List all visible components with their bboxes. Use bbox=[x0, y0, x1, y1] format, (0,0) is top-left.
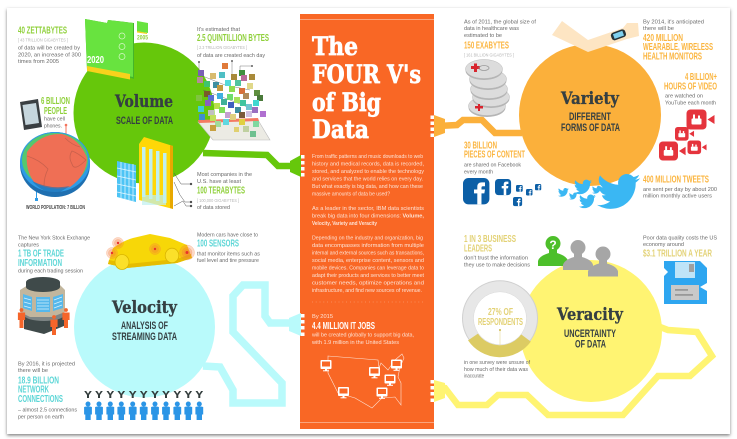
stat: 3.1 trillion: economy around bbox=[643, 242, 684, 248]
stat: 30 billion pieces of content: every month bbox=[464, 169, 493, 175]
text block: intro: stored, and analyzed to enable the technology bbox=[312, 169, 424, 175]
icon: business leaders silhouettes: ? bbox=[549, 238, 557, 252]
stat: 150 exabytes: [ 161 BILLION GIGABYTES ] bbox=[464, 52, 514, 58]
stat: 6 billion people: 6 BILLION bbox=[41, 96, 70, 107]
icon: arm with wearable bbox=[552, 21, 639, 52]
stat: 40 zettabytes: of data will be created by bbox=[18, 46, 80, 52]
text block: intro: and services that the world relies on every day. bbox=[312, 176, 423, 182]
stat: 100 terabytes bbox=[197, 172, 252, 211]
stat: 6 billion people: have cell bbox=[44, 117, 65, 123]
stat: 3.1 trillion: Poor data quality costs the US bbox=[643, 235, 717, 241]
stat: 18.9 billion connections: there will be bbox=[18, 368, 48, 374]
stat: 4.4 million IT jobs: with 1.9 million in the United States bbox=[311, 340, 399, 346]
panel: orange centre column bbox=[300, 14, 434, 429]
heading: velocity bbox=[111, 298, 178, 343]
stat: 420 million monitors: By 2014, it's anticipated bbox=[643, 19, 704, 25]
heading: variety: FORMS OF DATA bbox=[561, 122, 620, 134]
text block: intro: From traffic patterns and music downloads to web bbox=[312, 154, 423, 160]
text block: data sources: internal and external sources such as transactions, bbox=[312, 250, 424, 256]
icon: stock exchange bbox=[18, 277, 70, 335]
plug: veracity bbox=[430, 380, 445, 402]
text block: data sources: customer needs, optimize operations and bbox=[312, 280, 424, 286]
stat: 1 in 3 business leaders: don't trust the information bbox=[464, 256, 528, 262]
stat: 30 billion pieces of content: 30 BILLION bbox=[464, 140, 497, 151]
heading: volume: SCALE OF DATA bbox=[116, 115, 173, 127]
title: The bbox=[312, 32, 358, 61]
heading: veracity bbox=[556, 305, 624, 350]
stat: 1 in 3 business leaders: LEADERS bbox=[464, 243, 492, 254]
stat: 6 billion people bbox=[41, 96, 70, 129]
panel: velocity circle bbox=[74, 256, 215, 398]
icon: data cubes on grid bbox=[196, 60, 270, 140]
stat: 1 TB of trade information: INFORMATION bbox=[18, 258, 62, 269]
stat: 4 billion hours of video: YouTube each month bbox=[665, 100, 716, 106]
plug: volume bbox=[290, 155, 304, 177]
icon: youtube cameras bbox=[659, 110, 714, 160]
text block: data sources: Depending on the industry and organization, big bbox=[312, 236, 423, 242]
stat: 30 billion pieces of content: PIECES OF CONTENT bbox=[464, 150, 525, 161]
stat: 3.1 trillion bbox=[643, 235, 717, 260]
icon: yellow car with sensors bbox=[106, 234, 194, 270]
text block: data sources: infrastructure, and find new sources of revenue. bbox=[312, 288, 422, 294]
stat: 1 in 3 business leaders bbox=[464, 234, 530, 268]
stat: 100 sensors bbox=[197, 233, 260, 264]
stat: 18.9 billion connections: – almost 2.5 connections bbox=[18, 408, 77, 414]
stat: 2.5 quintillion bytes: [ 2.3 TRILLION GIGABYTES ] bbox=[197, 45, 247, 50]
heading: veracity: UNCERTAINTY bbox=[564, 328, 616, 340]
stat: 100 terabytes: U.S. have at least bbox=[197, 179, 241, 185]
connector: variety bbox=[438, 120, 522, 133]
plug: velocity bbox=[289, 313, 304, 336]
stat: 30 billion pieces of content bbox=[464, 140, 525, 175]
stat: 100 sensors: Modern cars have close to bbox=[197, 233, 258, 239]
stat: 40 zettabytes: times from 2005 bbox=[18, 59, 59, 65]
panel: volume circle bbox=[74, 42, 214, 184]
stat: 4 billion hours of video bbox=[664, 72, 717, 106]
stat: 18.9 billion connections: NETWORK bbox=[18, 385, 49, 396]
plug: variety bbox=[430, 115, 445, 137]
title: of Big bbox=[312, 88, 381, 117]
stat: 2.5 quintillion bytes: It's estimated that bbox=[197, 27, 240, 33]
stat: 2.5 quintillion bytes: of data are created each day bbox=[197, 53, 265, 59]
text block: survey: how much of their data was bbox=[464, 367, 528, 373]
connector: velocity bbox=[203, 285, 292, 403]
icon: 2005 memory card bbox=[137, 21, 148, 42]
title bbox=[312, 32, 421, 144]
icon: 2005 memory card: 2005 bbox=[137, 34, 148, 42]
stat: 420 million monitors: 420 MILLION bbox=[643, 33, 683, 44]
stat: 420 million monitors: HEALTH MONITORS bbox=[643, 51, 702, 62]
panel: veracity circle bbox=[520, 260, 662, 402]
icon: blue building bbox=[117, 161, 136, 202]
icon: US map with monitors bbox=[320, 354, 404, 408]
stat: 150 exabytes: 150 EXABYTES bbox=[464, 41, 509, 52]
text block: IBM dimensions: As a leader in the sector, IBM data scientists bbox=[312, 206, 424, 212]
text block: data sources: mobile devices. Companies can leverage data to bbox=[312, 265, 424, 271]
stat: 400 million tweets: million monthly active users bbox=[643, 194, 712, 200]
stat: 1 TB of trade information: The New York Stock Exchange bbox=[18, 235, 90, 241]
stat: 18.9 billion connections: By 2016, it is projected bbox=[18, 361, 75, 367]
stat: 100 sensors: 100 SENSORS bbox=[197, 239, 239, 250]
stat: 40 zettabytes: 2020, an increase of 300 bbox=[18, 52, 81, 58]
stat: 1 TB of trade information: 1 TB OF TRADE bbox=[18, 249, 64, 260]
text block: IBM dimensions: Velocity, Variety and Veracity bbox=[312, 221, 378, 227]
icon: disk stack bbox=[466, 60, 510, 117]
icon: facebook logos bbox=[463, 178, 541, 206]
heading: velocity: ANALYSIS OF bbox=[121, 320, 168, 332]
stat: 100 terabytes: Most companies in the bbox=[197, 172, 252, 178]
stat: 30 billion pieces of content: are shared on Facebook bbox=[464, 163, 521, 169]
text block: survey: in one survey were unsure of bbox=[464, 360, 530, 366]
stat: 1 TB of trade information: during each trading session bbox=[18, 269, 83, 275]
stat: 100 sensors: that monitor items such as bbox=[197, 251, 260, 257]
stat: 1 in 3 business leaders: they use to make decisions bbox=[464, 262, 530, 268]
panel: variety circle bbox=[519, 44, 661, 186]
heading: volume bbox=[114, 92, 173, 127]
connector: volume bbox=[203, 153, 292, 166]
text block: data sources: data encompasses information from multiple bbox=[312, 243, 424, 249]
stat: 1 TB of trade information bbox=[18, 235, 90, 275]
stat: 150 exabytes: data in healthcare was bbox=[464, 26, 519, 32]
stat: 18.9 billion connections: CONNECTIONS bbox=[18, 394, 63, 405]
heading: velocity: STREAMING DATA bbox=[112, 331, 177, 343]
heading: veracity: Veracity bbox=[556, 305, 624, 325]
heading: variety bbox=[560, 89, 620, 134]
heading: variety: DIFFERENT bbox=[569, 111, 611, 123]
stat: 400 million tweets: are sent per day by about 200 bbox=[643, 187, 717, 193]
stat: 2.5 quintillion bytes: 2.5 QUINTILLION BYTES bbox=[197, 33, 269, 44]
icon: twitter birds bbox=[558, 174, 640, 209]
stat: 40 zettabytes: [ 43 TRILLION GIGABYTES ] bbox=[18, 38, 68, 43]
chart: 27% donut: 27% OF bbox=[488, 307, 513, 318]
text block: intro: But what exactly is big data, and how can these bbox=[312, 184, 423, 190]
stat: 4 billion hours of video: are watched on bbox=[665, 94, 703, 100]
icon: connected people row bbox=[84, 391, 203, 420]
stat: 6 billion people: PEOPLE bbox=[44, 106, 67, 117]
heading: volume: Volume bbox=[114, 92, 173, 112]
stat: 100 sensors: fuel level and tire pressure bbox=[197, 258, 259, 264]
heading: velocity: Velocity bbox=[111, 298, 178, 318]
icon: wires to data stores bbox=[174, 173, 192, 207]
stat: 150 exabytes: As of 2011, the global size of bbox=[464, 19, 536, 25]
title: FOUR V's bbox=[312, 60, 421, 89]
stat: 40 zettabytes bbox=[18, 26, 81, 65]
stat: 420 million monitors: there will be bbox=[643, 26, 674, 32]
stat: 100 terabytes: of data stored bbox=[197, 205, 230, 211]
icon: 2020 memory card bbox=[85, 19, 134, 80]
text block: IBM dimensions: break big data into four dimensions: Volume, bbox=[312, 214, 424, 220]
stat: 18.9 billion connections bbox=[18, 361, 77, 420]
text block: data sources: social media, enterprise content, sensors and bbox=[312, 258, 424, 264]
icon: yellow building bbox=[139, 137, 173, 209]
stat: 150 exabytes: estimated to be bbox=[464, 33, 502, 39]
text block: intro: history and medical records, data is recorded, bbox=[312, 162, 424, 168]
text block: survey: inaccurate bbox=[464, 374, 484, 380]
stat: 4.4 million IT jobs: By 2015 bbox=[312, 314, 333, 320]
heading: veracity: OF DATA bbox=[575, 338, 606, 350]
stat: 4.4 million IT jobs: 4.4 MILLION IT JOBS bbox=[312, 321, 375, 332]
stat: 4.4 million IT jobs: will be created globally to support big data, bbox=[311, 333, 414, 339]
chart: 27% donut bbox=[462, 280, 538, 356]
stat: 4.4 million IT jobs bbox=[311, 314, 414, 346]
icon: smartphone bbox=[20, 99, 42, 130]
text block: IBM dimensions bbox=[312, 206, 424, 227]
text block: intro bbox=[312, 154, 424, 198]
text block: data sources: adapt their products and services to better meet bbox=[312, 273, 424, 279]
stat: 420 million monitors bbox=[643, 19, 713, 62]
stat: 6 billion people: phones. bbox=[44, 123, 62, 129]
stat: 18.9 billion connections: per person on earth bbox=[18, 414, 64, 420]
icon: business leaders silhouettes bbox=[538, 236, 618, 276]
stat: 400 million tweets bbox=[643, 174, 717, 200]
connector: veracity bbox=[437, 325, 712, 415]
title: Data bbox=[312, 115, 369, 144]
text block: intro: massive amounts of data be used? bbox=[312, 192, 390, 198]
text block: survey bbox=[464, 360, 530, 380]
label: world population: WORLD POPULATION: 7 BILLION bbox=[26, 205, 85, 211]
stat: 1 TB of trade information: captures bbox=[18, 242, 39, 248]
stat: 1 in 3 business leaders: 1 IN 3 BUSINESS bbox=[464, 234, 516, 245]
stat: 2.5 quintillion bytes bbox=[197, 27, 269, 59]
stat: 40 zettabytes: 40 ZETTABYTES bbox=[18, 26, 67, 37]
stat: 100 terabytes: 100 TERABYTES bbox=[197, 186, 245, 196]
chart: 27% donut: RESPONDENTS bbox=[478, 317, 523, 328]
stat: 100 terabytes: [ 100,000 GIGABYTES ] bbox=[197, 198, 239, 203]
icon: broken floppy disk bbox=[664, 261, 707, 304]
icon: globe bbox=[20, 124, 90, 201]
stat: 150 exabytes bbox=[464, 19, 536, 58]
heading: variety: Variety bbox=[560, 89, 620, 109]
icon: 2020 memory card: 2020 bbox=[87, 55, 104, 66]
text block: data sources bbox=[312, 236, 424, 294]
stat: 18.9 billion connections: 18.9 BILLION bbox=[18, 375, 59, 386]
